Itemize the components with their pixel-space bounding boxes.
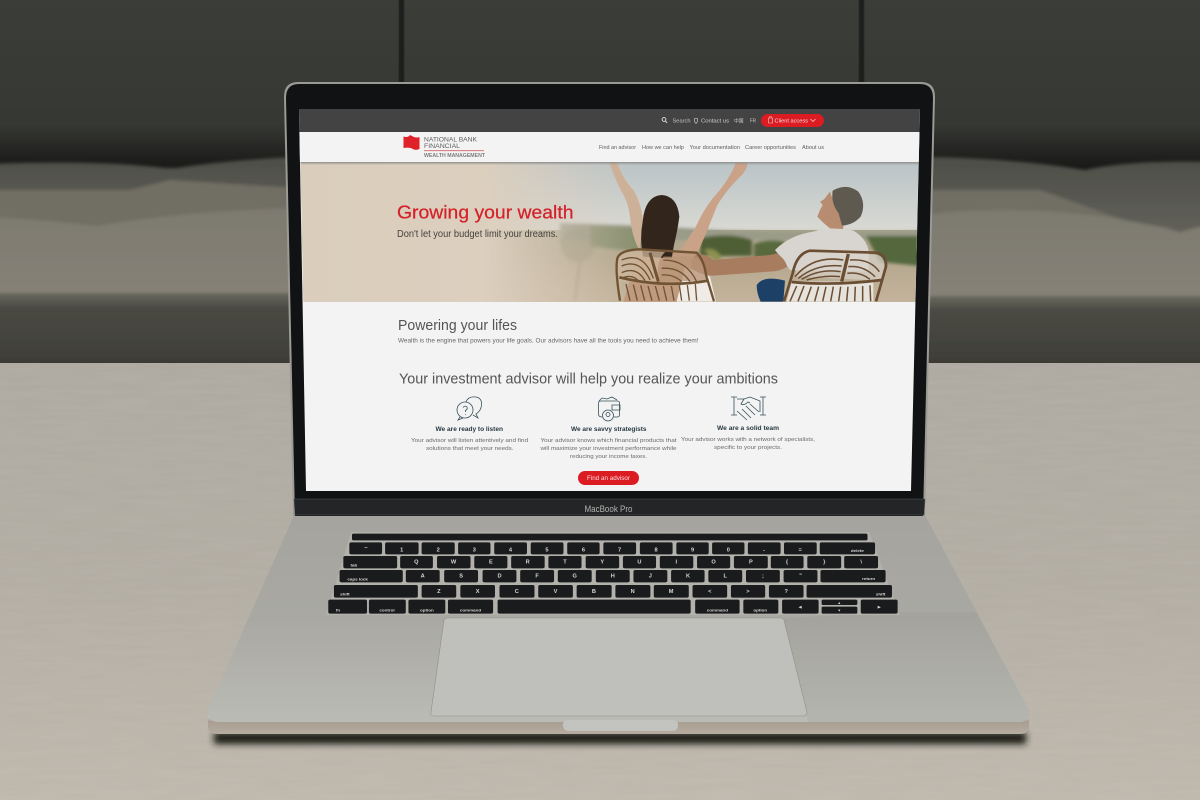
chair 1: [617, 249, 714, 301]
key legends: command: [460, 608, 482, 613]
key legends: V: [554, 589, 558, 595]
utility bar: Search: [672, 118, 690, 124]
key legends: M: [669, 589, 674, 595]
feature: solid team: We are a solid team: [717, 425, 779, 432]
feature: savvy strategists: [539, 397, 677, 460]
key legends: O: [711, 560, 716, 566]
menu items: [599, 145, 824, 150]
navigation bar: [295, 132, 925, 162]
key legends: 6: [582, 548, 585, 553]
key legends: -: [763, 548, 765, 553]
photo sky: [295, 162, 925, 232]
key legends: C: [515, 589, 519, 595]
key legends: fn: [336, 608, 341, 613]
logo: [404, 135, 485, 159]
key legends: L: [724, 574, 728, 580]
menu items: Find an advisor: [599, 145, 636, 151]
feature: solid team: [681, 397, 815, 451]
key legends: >: [746, 589, 750, 595]
feature: ready to listen: Your advisor will listen attentively and find: [411, 438, 528, 444]
client access button: Client access: [774, 118, 808, 124]
key legends: P: [749, 560, 753, 566]
key legends: J: [649, 574, 652, 580]
button: find an advisor: [578, 471, 639, 485]
hair: [641, 195, 679, 258]
key row 2: [343, 556, 878, 568]
key legends: command: [707, 608, 728, 613]
blurred tree: [562, 231, 592, 262]
feature: savvy strategists: reducing your income taxes.: [570, 454, 647, 460]
key legends: Y: [600, 560, 605, 566]
key legends: control: [379, 608, 395, 613]
logo: FINANCIAL: [424, 143, 460, 150]
key legends: T: [563, 560, 567, 566]
key legends: shift: [340, 592, 350, 597]
keyboard well: [326, 532, 900, 615]
key legends: A: [421, 574, 425, 580]
key legends: ;: [762, 574, 764, 580]
linking arm: [691, 253, 787, 276]
brand label: MacBook Pro: [584, 504, 632, 514]
key legends: R: [526, 560, 530, 566]
laptop shadow: [214, 732, 1026, 744]
sofa seat cushions, left: [0, 157, 295, 370]
feature: ready to listen: [411, 397, 528, 452]
chair 2: [784, 251, 886, 301]
key legends: delete: [851, 548, 865, 553]
key legends: I: [676, 560, 678, 566]
key legends: K: [686, 574, 690, 580]
key legends: 4: [509, 548, 512, 553]
key legends: U: [637, 560, 642, 566]
laptop base: [208, 515, 1029, 734]
key legends: N: [631, 589, 635, 595]
key legends: D: [497, 574, 502, 580]
icon: handshake: [731, 397, 766, 420]
table top: [0, 363, 1200, 800]
raised arms: [609, 162, 643, 250]
hair: [832, 187, 863, 226]
button: find an advisor: Find an advisor: [587, 476, 630, 482]
key legends: 8: [654, 548, 658, 553]
key legends: S: [459, 574, 463, 580]
utility bar: [295, 109, 925, 132]
sofa backrest cushions: [0, 0, 1200, 172]
hero subheading: Don't let your budget limit your dreams.: [397, 229, 558, 240]
key legends: F: [535, 574, 540, 580]
key legends: ◂: [798, 605, 802, 610]
intro section: Powering your lifes: [398, 318, 517, 334]
key legends: caps lock: [347, 577, 369, 581]
key legends: 5: [545, 548, 549, 553]
feature: solid team: specific to your projects.: [714, 445, 782, 451]
intro section: [398, 318, 699, 344]
utility bar: 中国: [734, 118, 744, 124]
face and neck: [817, 192, 843, 229]
back: [624, 248, 700, 302]
laptop lid: [284, 82, 935, 516]
key legends: G: [573, 574, 577, 580]
hero heading: Growing your wealth: [397, 202, 574, 222]
menu items: Your documentation: [690, 145, 740, 151]
lower shirt: [787, 282, 873, 302]
photo horizon and bushes: [560, 223, 920, 266]
key legends: ▴: [837, 600, 841, 605]
jeans: [757, 279, 785, 302]
key legends: ~: [364, 546, 368, 552]
deck: [208, 515, 1029, 722]
feature: ready to listen: We are ready to listen: [436, 426, 503, 433]
key legends: Z: [437, 589, 441, 595]
icon: pin: [694, 118, 698, 124]
photo people and chairs: [609, 162, 886, 302]
key legends: ?: [785, 589, 788, 595]
sofa seat cushions, right: [925, 157, 1200, 370]
thumb notch: [563, 720, 678, 731]
logo: WEALTH MANAGEMENT: [424, 153, 485, 159]
right deck tint: [784, 612, 1029, 722]
feature: solid team: Your advisor works with a network of specialists,: [681, 437, 815, 443]
hero banner: [295, 162, 925, 303]
utility bar: Contact us: [701, 118, 729, 124]
website on screen: [295, 105, 925, 495]
key legends: option: [420, 608, 434, 613]
key legends: X: [476, 589, 480, 595]
utility bar: FR: [750, 118, 756, 124]
icon: speech bubbles: [457, 397, 482, 420]
hero top shadow: [300, 162, 918, 164]
trackpad: [431, 618, 807, 716]
key legends: Q: [414, 560, 419, 566]
front lip: [208, 716, 1029, 734]
key legends: ▸: [877, 605, 881, 610]
key legends: 9: [691, 548, 694, 553]
key legends: E: [489, 560, 493, 566]
icon: search: [662, 118, 667, 123]
key legends: H: [611, 574, 615, 580]
menu items: Career opportunities: [745, 145, 796, 151]
feature: savvy strategists: We are savvy strategists: [571, 426, 647, 433]
touch bar: [352, 534, 868, 540]
logo: NATIONAL BANK: [424, 136, 478, 144]
key row 5: [328, 600, 898, 614]
hinge band: [294, 499, 925, 515]
key legends: 0: [727, 548, 730, 553]
key legends: 3: [473, 548, 476, 553]
key legends: =: [799, 548, 802, 553]
key row 4: [334, 585, 892, 598]
section heading: Your investment advisor will help you realize your ambitions: [399, 372, 778, 388]
key legends: [336, 546, 886, 613]
page background: [295, 105, 925, 495]
feature: savvy strategists: Your advisor knows which financial products that: [540, 438, 677, 444]
key row 3: [340, 570, 886, 582]
client access button: [761, 114, 824, 127]
feature: ready to listen: solutions that meet your needs.: [426, 446, 514, 452]
intro section: Wealth is the engine that powers your life goals. Our advisors have all the tools you need to achieve them!: [398, 338, 699, 344]
key legends: ▾: [837, 608, 841, 613]
beige fade panel: [295, 162, 635, 303]
key legends: shift: [876, 592, 886, 597]
key legends: <: [708, 589, 712, 595]
key legends: B: [592, 589, 596, 595]
black bezel: [286, 84, 933, 516]
man: [691, 187, 873, 302]
menu items: How we can help: [642, 145, 684, 151]
key legends: \: [860, 560, 862, 566]
silver lid rim: [284, 82, 935, 516]
key row 1: [349, 542, 875, 554]
woman: [609, 162, 748, 302]
key legends: ": [799, 574, 802, 580]
feature: savvy strategists: will maximize your investment performance while: [539, 446, 676, 452]
key legends: option: [753, 608, 768, 613]
key legends: 1: [400, 548, 403, 553]
key legends: W: [451, 560, 457, 566]
keyboard: [328, 534, 898, 614]
key legends: tab: [350, 563, 358, 567]
icon: wallet with person: [598, 397, 620, 421]
key legends: 7: [618, 548, 621, 553]
key legends: return: [862, 576, 876, 581]
shirt: [775, 228, 869, 272]
key legends: }: [823, 560, 825, 566]
photo ground: [295, 230, 925, 303]
menu items: About us: [802, 145, 824, 151]
key legends: 2: [437, 548, 440, 553]
key legends: {: [786, 560, 788, 566]
